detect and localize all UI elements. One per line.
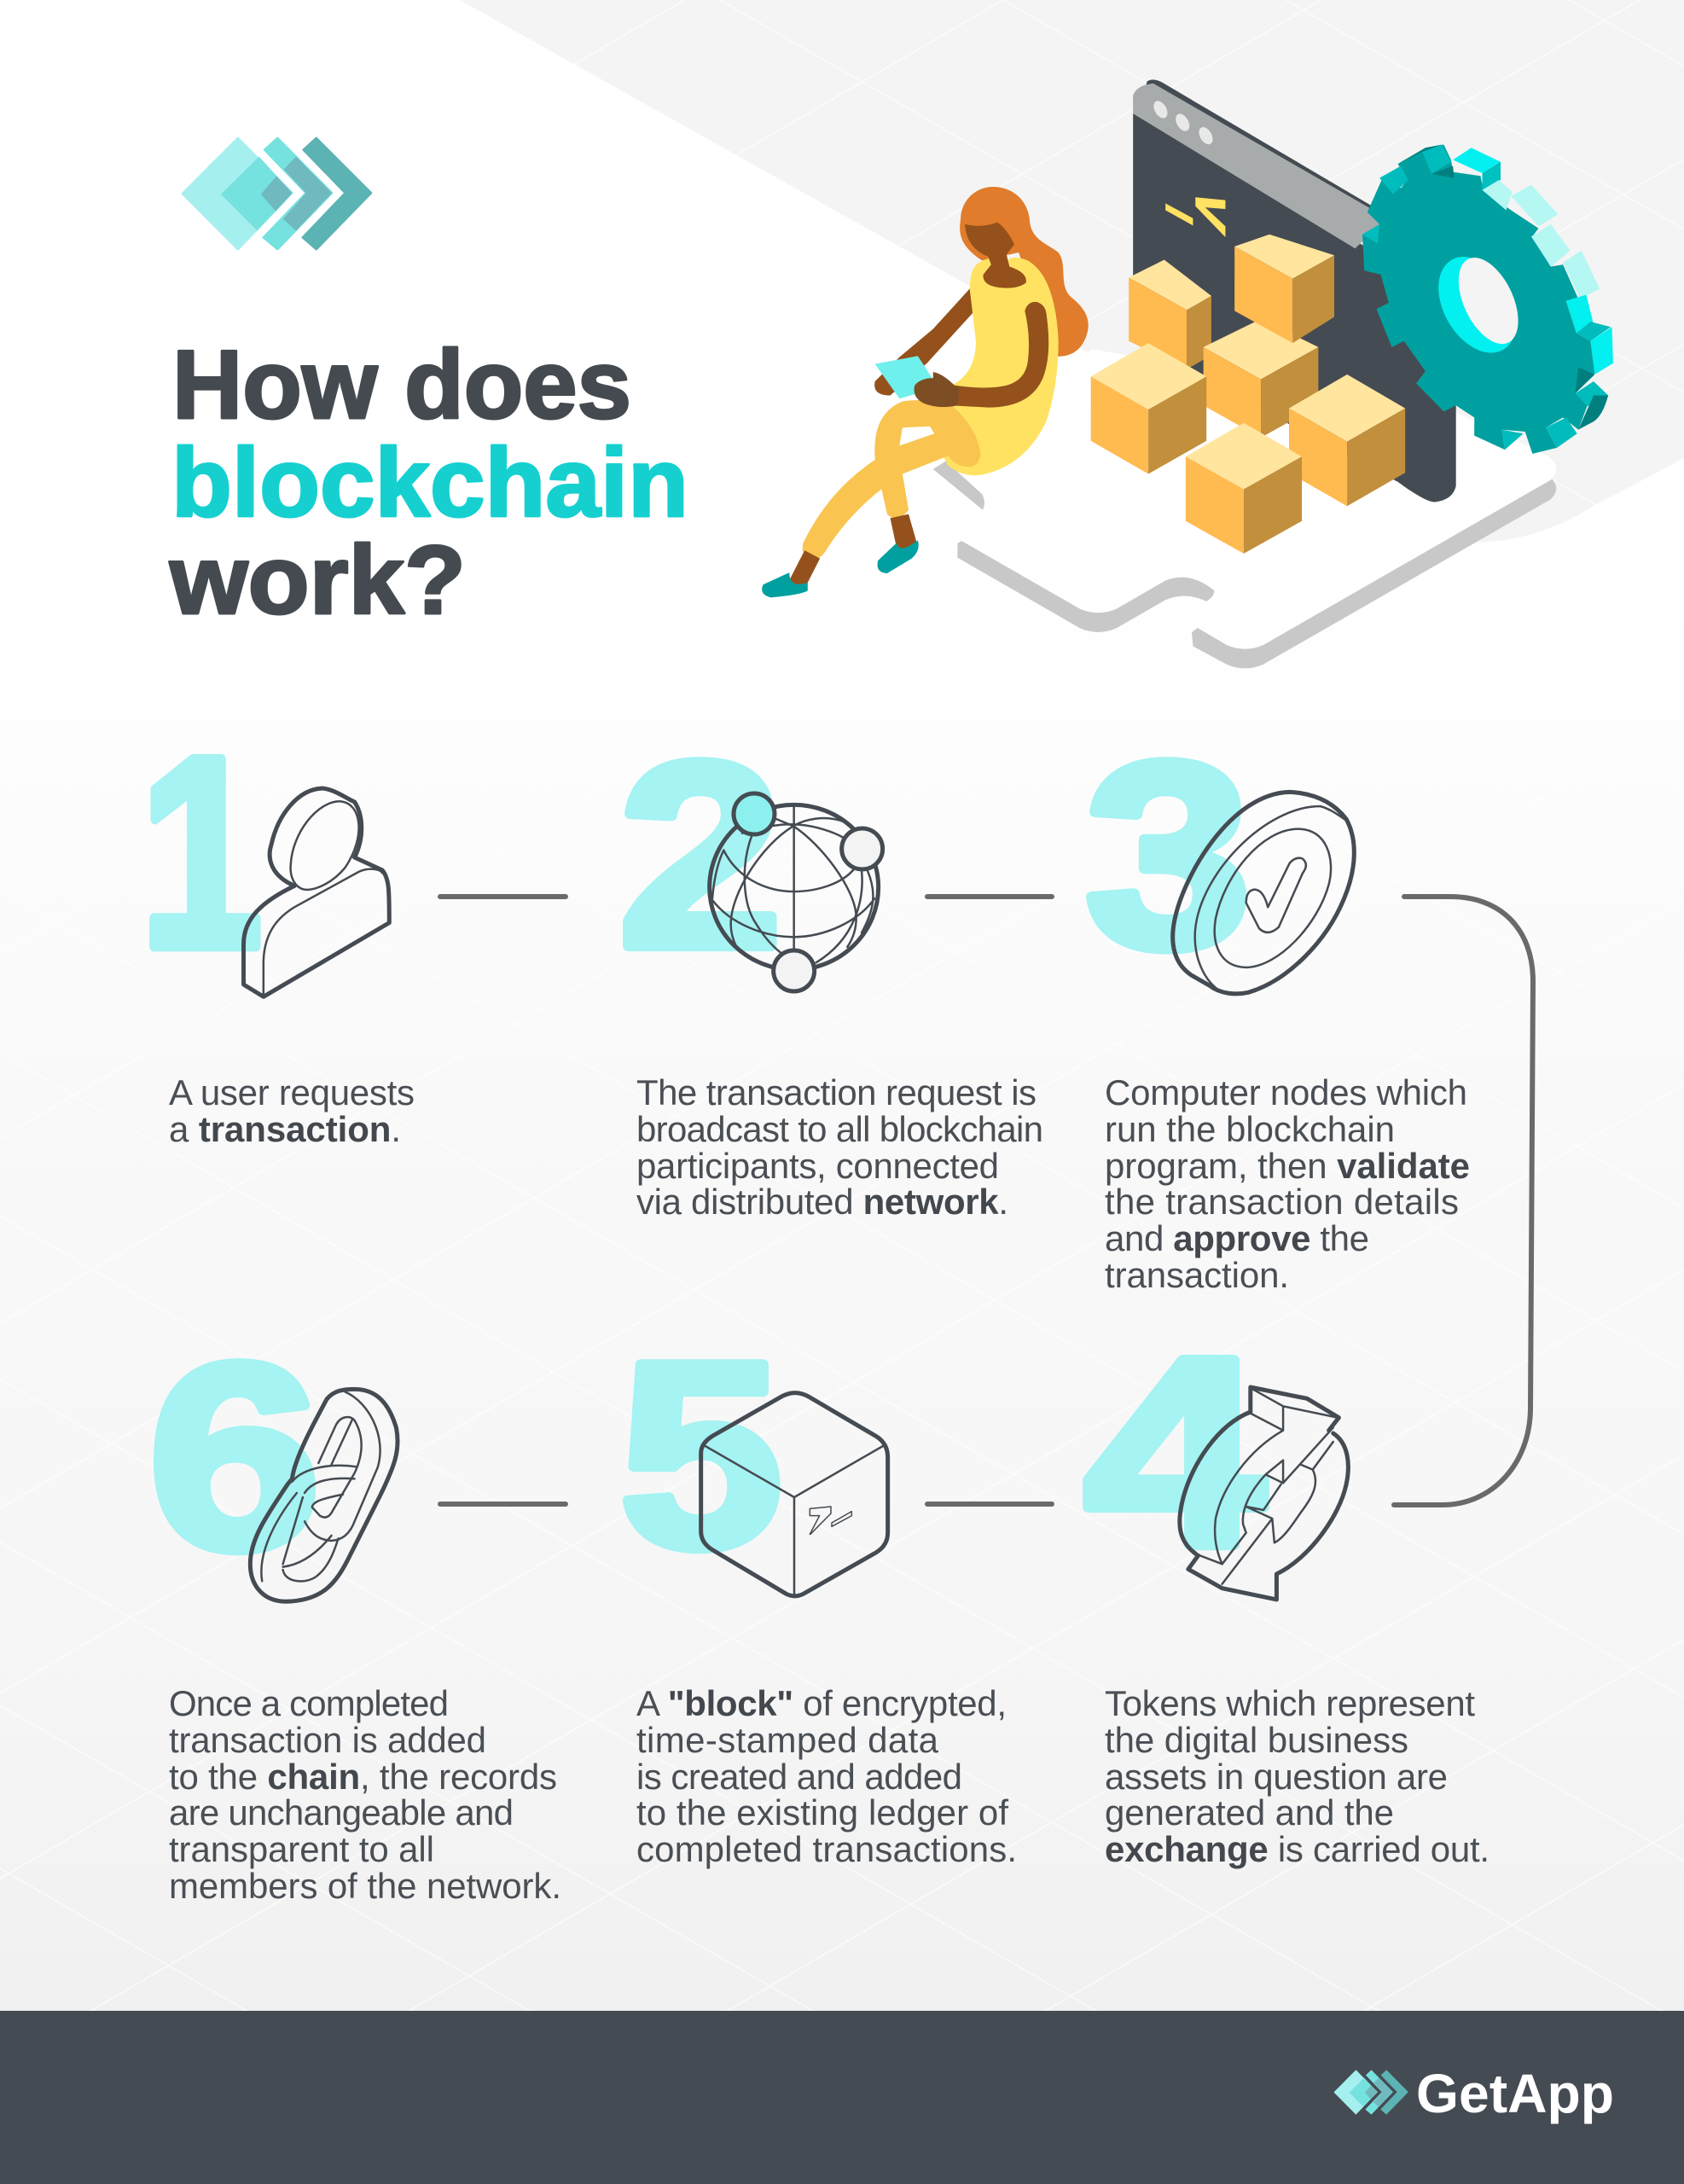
text: step 2: The transaction request is xyxy=(636,1072,1037,1112)
text: step 3: and approve the xyxy=(1105,1218,1369,1258)
step 2 xyxy=(618,707,1043,1222)
text: step 1: A user requests xyxy=(169,1072,415,1112)
code window xyxy=(1133,79,1456,502)
text: step 5: completed transactions. xyxy=(636,1829,1017,1869)
text: step 1: a transaction. xyxy=(169,1109,401,1149)
text: step 5: time-stamped data xyxy=(636,1720,939,1760)
text: step 2: participants, connected xyxy=(636,1146,999,1186)
puzzle piece platform xyxy=(933,349,1556,668)
step 5 xyxy=(619,1308,1017,1869)
numeral 2: 2 xyxy=(618,707,782,1002)
text: step 4: exchange is carried out. xyxy=(1105,1829,1489,1869)
text: step 3: program, then validate xyxy=(1105,1146,1470,1186)
connector lines xyxy=(440,897,1533,1505)
text: step 6 xyxy=(169,1683,561,1906)
seated woman xyxy=(762,187,1089,597)
text: step 6: to the chain, the records xyxy=(169,1757,557,1797)
title: work? xyxy=(169,526,466,635)
text: step 2: via distributed network. xyxy=(636,1182,1008,1222)
text: step 6: transparent to all xyxy=(169,1829,434,1869)
text: step 4: generated and the xyxy=(1105,1792,1394,1833)
text: step 6: transaction is added xyxy=(169,1720,486,1760)
icon: data block cube xyxy=(701,1393,888,1596)
text: step 4: assets in question are xyxy=(1105,1757,1448,1797)
step 6 xyxy=(148,1310,561,1906)
footer band xyxy=(0,2011,1684,2184)
text: step 3: the transaction details xyxy=(1105,1182,1459,1222)
numeral 6: 6 xyxy=(148,1310,321,1604)
step 4 xyxy=(1084,1302,1489,1869)
background grey panel xyxy=(460,0,1684,543)
text: step 3: run the blockchain xyxy=(1105,1109,1395,1149)
title: blockchain xyxy=(171,429,688,537)
step 1 xyxy=(140,701,415,1149)
numeral 4: 4 xyxy=(1084,1302,1267,1602)
text: step 1 xyxy=(169,1072,415,1149)
text: step 3: Computer nodes which xyxy=(1105,1072,1467,1112)
numeral 5: 5 xyxy=(619,1308,782,1602)
footer logo mark xyxy=(1334,2071,1408,2114)
text: step 4 xyxy=(1105,1683,1489,1869)
text: step 5: is created and added xyxy=(636,1757,962,1797)
cubes xyxy=(1091,235,1405,554)
text: step 5: to the existing ledger of xyxy=(636,1792,1008,1833)
text: step 3 xyxy=(1105,1072,1470,1295)
text: step 3: transaction. xyxy=(1105,1255,1289,1295)
footer wordmark: GetApp xyxy=(1416,2063,1614,2124)
title xyxy=(169,331,688,635)
hero illustration xyxy=(762,79,1613,668)
title: How does xyxy=(172,331,631,439)
logo: GetApp chevrons xyxy=(183,138,371,249)
text: step 5: A "block" of encrypted, xyxy=(636,1683,1007,1723)
text: step 6: Once a completed xyxy=(169,1683,449,1723)
numeral 1: 1 xyxy=(140,701,262,1004)
numeral 3: 3 xyxy=(1085,707,1251,1002)
text: step 4: Tokens which represent xyxy=(1105,1683,1475,1723)
icon: exchange arrows xyxy=(1180,1387,1348,1600)
icon: user xyxy=(244,788,389,996)
step 3 xyxy=(1085,707,1470,1295)
text: step 6: members of the network. xyxy=(169,1866,561,1906)
gear xyxy=(1362,144,1613,454)
text: step 4: the digital business xyxy=(1105,1720,1408,1760)
icon: coin with check xyxy=(1173,792,1354,994)
icon: globe network xyxy=(710,793,883,991)
text: step 2 xyxy=(636,1072,1043,1222)
text: step 6: are unchangeable and xyxy=(169,1792,514,1833)
text: step 2: broadcast to all blockchain xyxy=(636,1109,1043,1149)
icon: chain links xyxy=(250,1389,398,1601)
text: step 5 xyxy=(636,1683,1017,1869)
